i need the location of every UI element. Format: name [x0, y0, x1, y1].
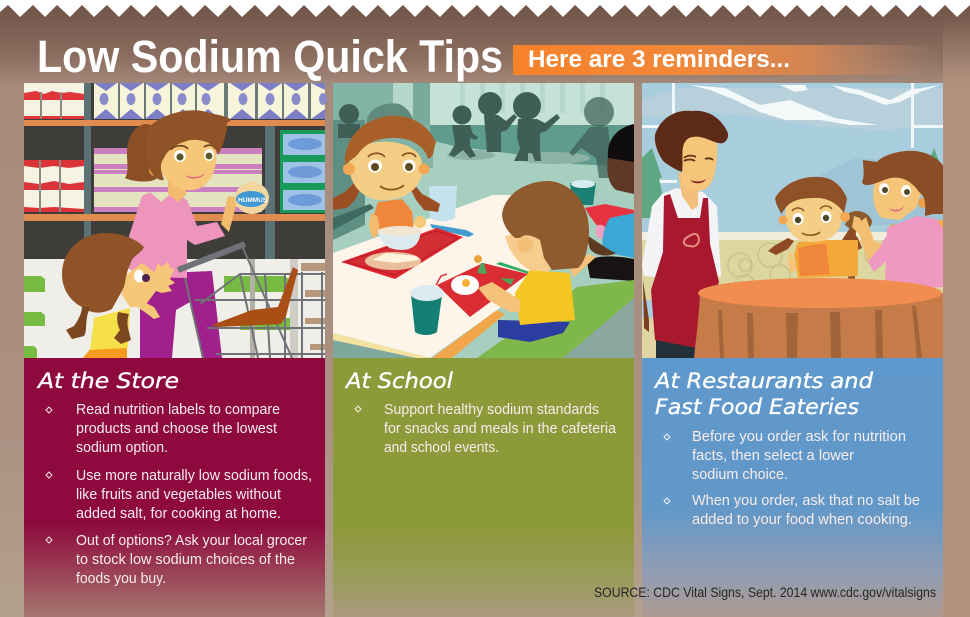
- window stripes: [393, 83, 605, 121]
- tips list: sodium choice.: [692, 466, 788, 483]
- hair: [862, 151, 943, 216]
- hair: [502, 181, 589, 270]
- hand arm: [478, 282, 520, 312]
- shirt: [90, 308, 130, 350]
- tips list: [664, 428, 920, 528]
- shirt: [372, 199, 414, 233]
- neck: [168, 180, 186, 202]
- tips list: foods you buy.: [76, 570, 166, 587]
- wall: [333, 83, 433, 168]
- window frame: [642, 83, 943, 183]
- hand: [136, 262, 175, 319]
- panel: at school: [333, 358, 634, 617]
- tips list: [46, 401, 312, 587]
- shirt: [868, 216, 943, 290]
- hair: [62, 233, 144, 313]
- woman: [125, 110, 269, 358]
- table: [694, 278, 943, 358]
- spoon: [430, 224, 474, 237]
- arm: [856, 217, 882, 261]
- tips list: like fruits and vegetables without: [76, 486, 282, 503]
- head: [785, 198, 842, 242]
- pants: [498, 320, 570, 342]
- tree: [642, 148, 667, 218]
- patterned wall: [642, 240, 943, 300]
- girl with pigtails: [333, 116, 440, 238]
- restaurant girl: [768, 177, 862, 278]
- face and arm: [122, 263, 172, 307]
- eyes and mouth: [174, 150, 186, 162]
- bag in cart: [212, 267, 298, 327]
- subtitle banner: Here are 3 reminders...: [528, 46, 790, 73]
- illustration: at school: [333, 83, 634, 358]
- green bench: [477, 280, 634, 358]
- heading line two: Fast Food Eateries: [655, 395, 859, 419]
- tips list: Before you order ask for nutrition: [692, 428, 906, 445]
- waiter: [642, 111, 728, 358]
- tips list: Use more naturally low sodium foods,: [76, 467, 312, 484]
- mother hand: [852, 216, 864, 235]
- hand: [787, 252, 797, 273]
- apron: [651, 194, 719, 348]
- glass: [429, 186, 457, 221]
- cloth folds: [718, 306, 922, 358]
- table: [333, 195, 583, 358]
- boy: [478, 181, 596, 342]
- panel: at the store: [24, 358, 325, 617]
- chair: [845, 211, 872, 279]
- hair: [775, 177, 847, 214]
- woman: HUMMUS: [238, 197, 268, 204]
- skirt: [83, 345, 127, 358]
- ponytail: [125, 124, 163, 182]
- right side strip: [943, 20, 970, 617]
- second tray with egg: [437, 255, 532, 317]
- eyes: [368, 160, 382, 172]
- freezer case: [24, 259, 325, 358]
- panel: at restaurants: [642, 358, 943, 617]
- heading: At the Store: [36, 369, 179, 393]
- tips list: added to your food when cooking.: [692, 511, 912, 528]
- tips list: Read nutrition labels to compare: [76, 401, 280, 418]
- red and white boxes: [24, 160, 84, 212]
- tips list: sodium option.: [76, 439, 168, 456]
- shirt: [642, 188, 721, 278]
- title: Low Sodium Quick Tips: [37, 31, 503, 82]
- left dark bench: [333, 120, 365, 240]
- far cup: [570, 183, 596, 205]
- table edge: [333, 333, 430, 358]
- hair: [146, 110, 231, 180]
- shirt: [515, 270, 575, 325]
- dark boy: [585, 124, 634, 281]
- counter: [430, 125, 634, 167]
- shirt: [794, 240, 858, 278]
- white ledge: [642, 232, 943, 240]
- tips list: added salt, for cooking at home.: [76, 505, 281, 522]
- tips list: facts, then select a lower: [692, 447, 854, 464]
- clouds: [690, 85, 940, 125]
- tray far: [585, 204, 634, 235]
- braids: [66, 306, 131, 344]
- legs: [655, 340, 695, 358]
- background silhouettes: [338, 92, 614, 178]
- shirt: [129, 192, 225, 278]
- food bowl and tray: [341, 216, 463, 279]
- upright posts: [84, 83, 275, 260]
- tips list: When you order, ask that no salt be: [692, 492, 920, 509]
- floor below table: [333, 333, 430, 358]
- bag strap: [643, 280, 649, 332]
- illustration: at the store: [24, 83, 327, 358]
- tips list: for snacks and meals in the cafeteria: [384, 420, 617, 437]
- tips list: to stock low sodium choices of the: [76, 551, 295, 568]
- tips list: Support healthy sodium standards: [384, 401, 599, 418]
- illustration: at restaurants: [642, 83, 943, 358]
- face: [505, 228, 560, 272]
- mother: [856, 151, 943, 290]
- green and blue boxes: [280, 130, 325, 213]
- arm and can: [221, 196, 238, 232]
- face: [873, 170, 922, 220]
- floor shadows: [447, 150, 590, 164]
- hair: [345, 116, 436, 165]
- tips list: products and choose the lowest: [76, 420, 278, 437]
- pants: [587, 256, 634, 281]
- teal cup: [410, 274, 447, 335]
- shirt: [602, 213, 634, 258]
- shelf boards: [24, 120, 325, 221]
- mountains: [642, 88, 943, 130]
- shopping cart: [178, 244, 325, 358]
- pants: [140, 271, 222, 358]
- girl: [62, 233, 175, 358]
- face: [673, 134, 717, 191]
- tips list: [355, 401, 617, 456]
- heading: At School: [344, 369, 453, 393]
- heading: At Restaurants and: [653, 369, 874, 393]
- hair: [655, 111, 728, 172]
- top shelf products: [24, 83, 327, 119]
- face: [158, 136, 216, 190]
- braid: [768, 228, 862, 255]
- pink boxes: [94, 148, 262, 212]
- zigzag top edge: [0, 0, 970, 17]
- eye: [134, 270, 144, 282]
- tips list: and school events.: [384, 439, 499, 456]
- pigtails: [333, 182, 440, 212]
- tips list: Out of options? Ask your local grocer: [76, 532, 307, 549]
- head: [349, 142, 422, 200]
- subtitle banner: [513, 45, 943, 75]
- back chair: [885, 220, 943, 280]
- neck: [678, 172, 698, 210]
